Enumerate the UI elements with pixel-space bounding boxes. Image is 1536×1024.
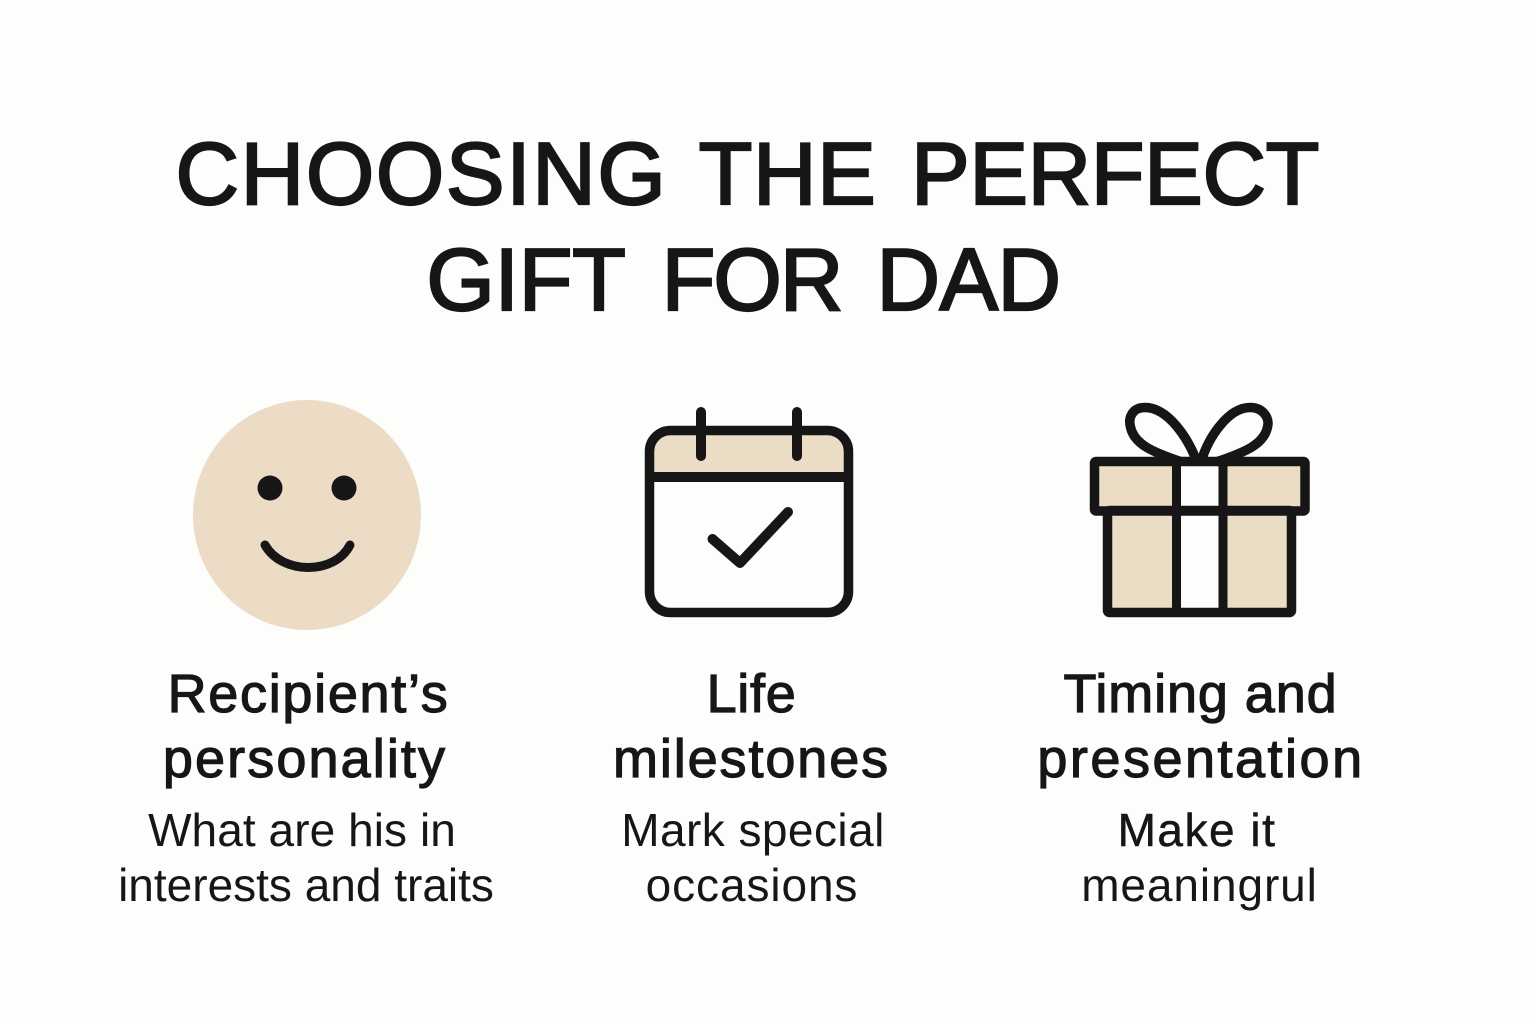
icon: smiley face	[193, 400, 421, 630]
column 3 heading: presentation	[1037, 729, 1365, 789]
column 1 text	[118, 804, 494, 911]
column 3 text: Make it	[1118, 804, 1276, 856]
column 1 text: interests and traits	[118, 859, 494, 911]
icon: gift box	[1090, 402, 1310, 618]
column 2 heading	[613, 664, 890, 789]
column 2 text	[621, 804, 885, 911]
column 3 text	[1081, 804, 1318, 911]
icon: calendar with check	[644, 407, 854, 618]
column 3 text: meaningrul	[1081, 859, 1318, 911]
title: DAD	[876, 230, 1060, 328]
column 3 heading: Timing and	[1063, 664, 1338, 724]
title	[176, 124, 1319, 328]
title: THE	[699, 124, 876, 222]
column 2 heading: milestones	[613, 729, 890, 789]
title: CHOOSING	[176, 124, 667, 222]
column 3 heading	[1037, 664, 1365, 789]
column 1 heading: personality	[163, 729, 447, 789]
column 1 heading: Recipient’s	[168, 664, 449, 724]
title: GIFT	[426, 230, 626, 328]
column 2 text: Mark special	[621, 804, 885, 856]
title: FOR	[662, 230, 841, 328]
title: PERFECT	[911, 124, 1319, 222]
column 1 text: What are his in	[148, 804, 456, 856]
column 2 heading: Life	[707, 664, 796, 724]
column 2 text: occasions	[646, 859, 858, 911]
column 1 heading	[163, 664, 449, 789]
